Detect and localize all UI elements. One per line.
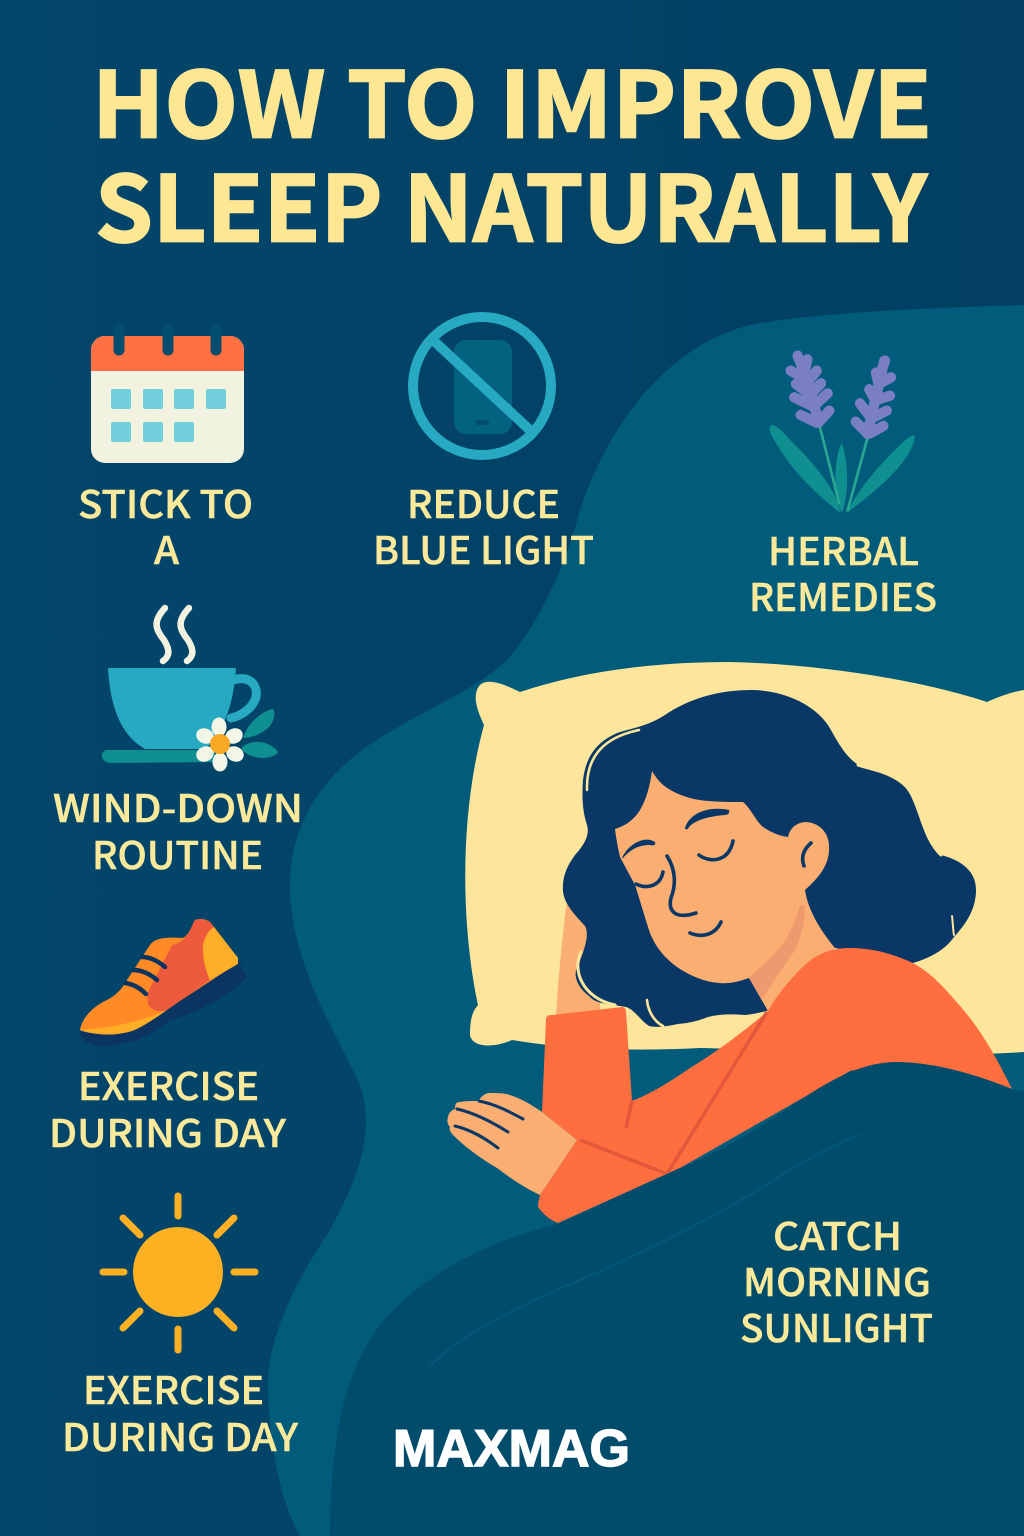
label: exercise during day <box>49 1056 287 1158</box>
finger lines <box>455 1101 523 1148</box>
icon: running shoe <box>80 919 247 1046</box>
label: reduce blue light: REDUCE <box>407 474 560 529</box>
background blob <box>268 305 1024 1536</box>
facial features <box>622 809 729 858</box>
label: stick to a: A <box>154 520 179 575</box>
hand <box>447 1093 577 1195</box>
label: herbal remedies <box>749 521 937 622</box>
illustration: sleeping woman <box>330 662 1024 1536</box>
label: exercise during day: DURING DAY <box>49 1103 287 1158</box>
neck shadow <box>749 905 805 999</box>
icon: tea cup with flower <box>102 608 278 772</box>
label: exercise during day: EXERCISE <box>78 1056 259 1111</box>
label: reduce blue light: BLUE LIGHT <box>373 520 594 575</box>
title: HOW TO IMPROVE <box>92 32 932 164</box>
hair highlights <box>578 730 954 1026</box>
label: exercise during day (sun): DURING DAY <box>62 1407 299 1462</box>
shirt seams <box>580 1012 767 1174</box>
label: catch morning sunlight: MORNING <box>743 1252 931 1307</box>
blanket <box>330 1062 1024 1536</box>
label: stick to a <box>78 474 253 575</box>
label: wind-down routine: WIND-DOWN <box>53 778 303 833</box>
label: herbal remedies: HERBAL <box>768 521 919 576</box>
pillow <box>465 662 1024 1054</box>
icon: sun <box>103 1196 255 1350</box>
label: exercise during day (sun): EXERCISE <box>83 1360 264 1415</box>
label: catch morning sunlight <box>740 1206 933 1353</box>
label: catch morning sunlight: CATCH <box>773 1206 902 1261</box>
label: stick to a: STICK TO <box>78 474 253 529</box>
label: exercise during day (sun) <box>62 1360 299 1462</box>
icon: no phone <box>413 317 551 455</box>
label: wind-down routine <box>53 778 303 880</box>
icon: lavender <box>770 356 914 513</box>
hair <box>563 690 976 1027</box>
blanket fold <box>430 1135 860 1366</box>
shirt <box>538 948 1012 1223</box>
label: reduce blue light <box>373 474 594 575</box>
icon: calendar <box>91 328 244 463</box>
logo: maxmag: MAXMAG <box>393 1420 630 1478</box>
label: wind-down routine: ROUTINE <box>92 825 263 880</box>
title: SLEEP NATURALLY <box>95 136 928 268</box>
arm behind head <box>556 900 600 1016</box>
face and neck <box>615 771 835 1011</box>
title <box>92 32 932 268</box>
label: catch morning sunlight: SUNLIGHT <box>740 1298 933 1353</box>
label: herbal remedies: REMEDIES <box>749 567 937 622</box>
